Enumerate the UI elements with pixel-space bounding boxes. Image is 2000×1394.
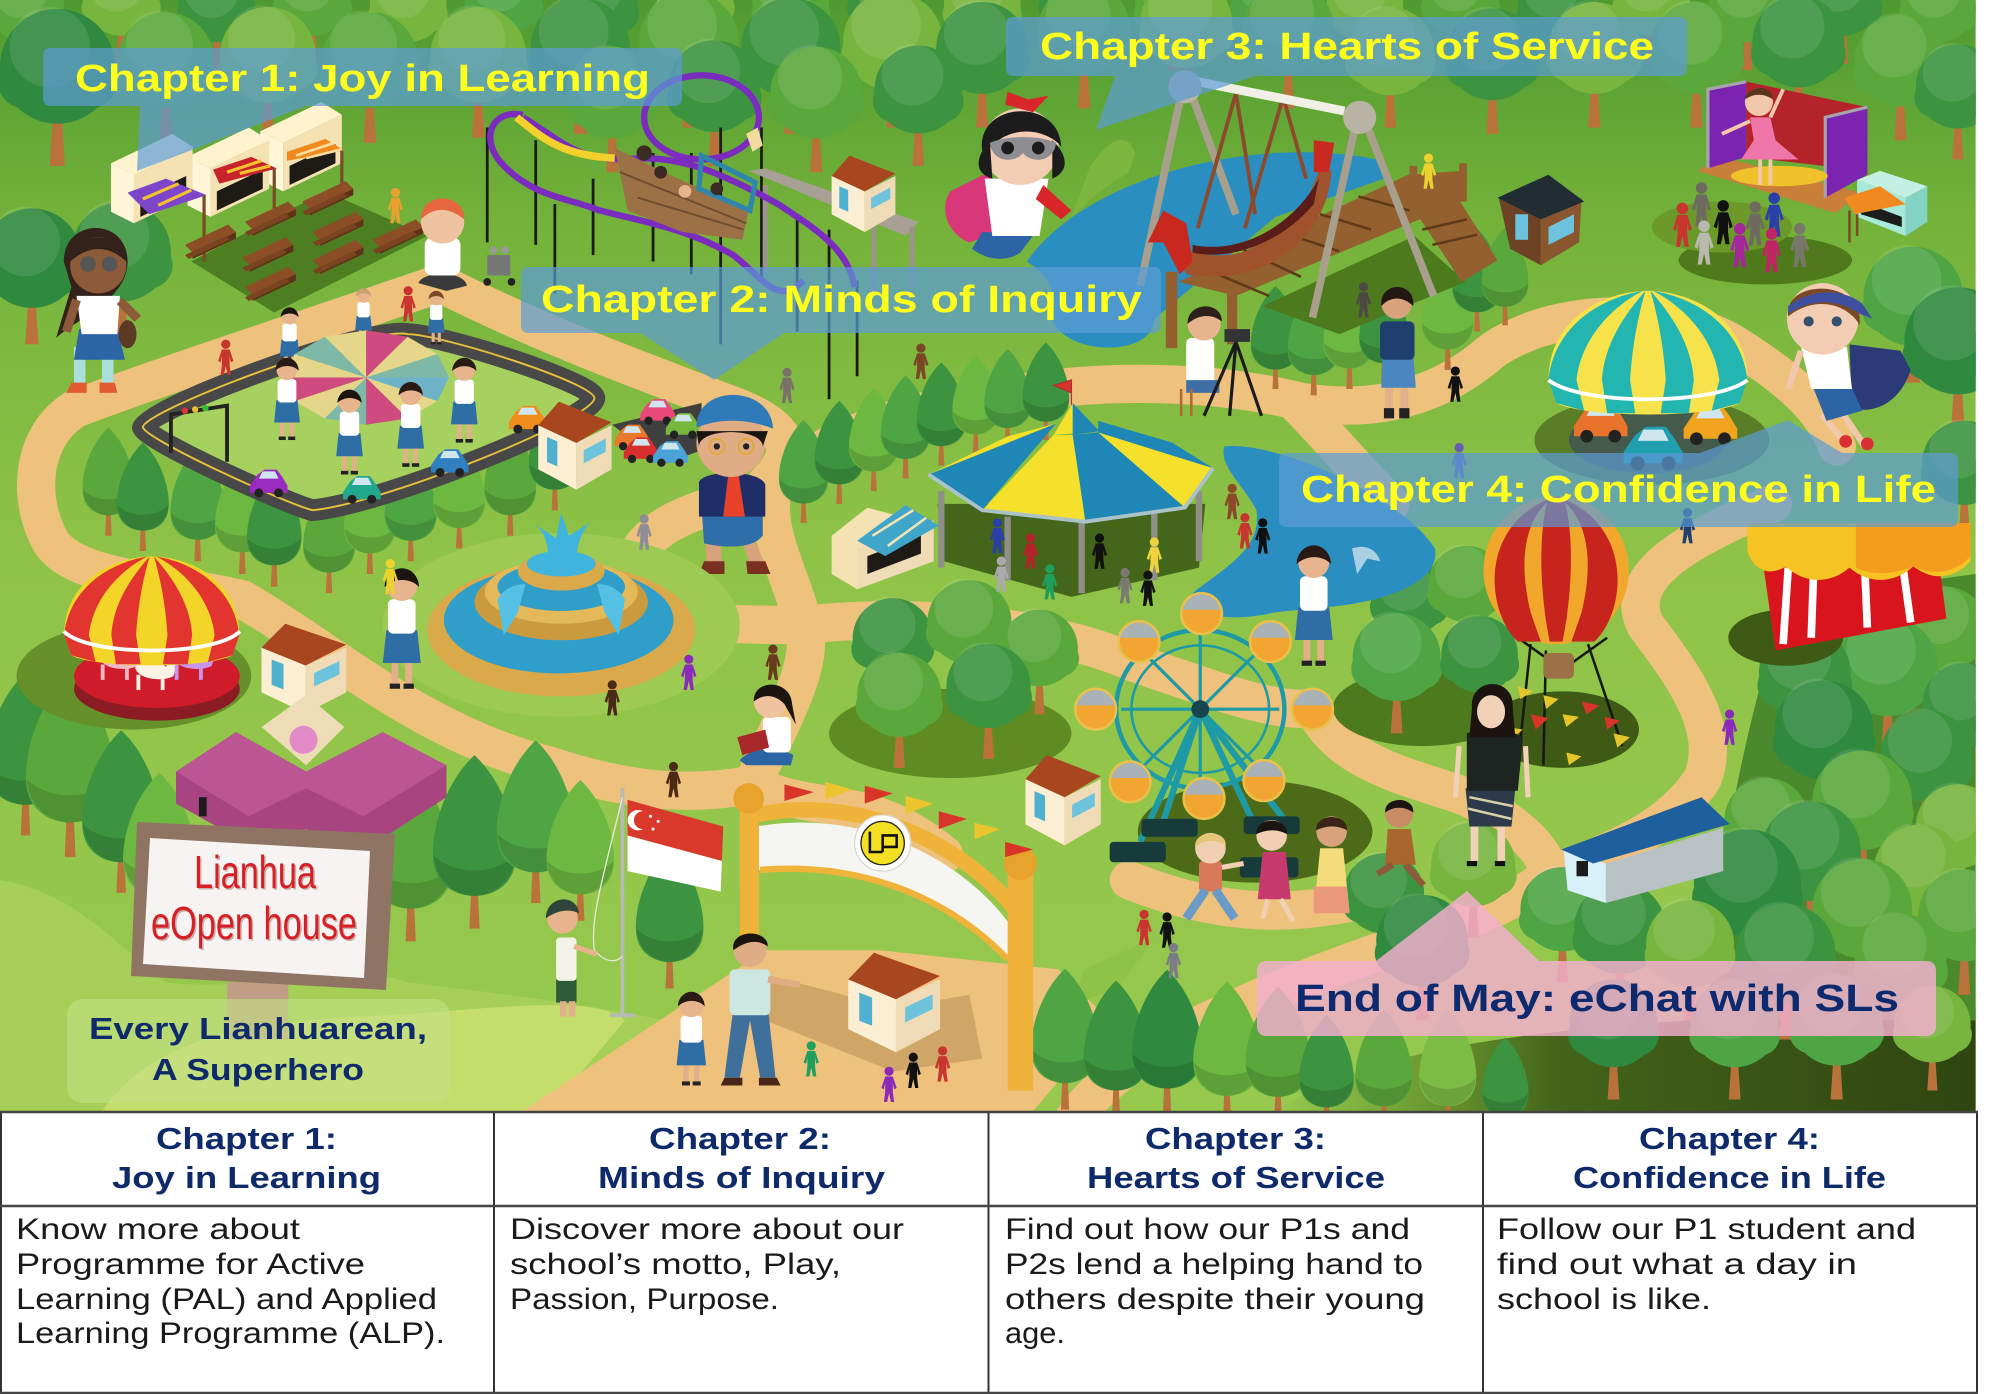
character: girl with satchel bbox=[56, 228, 138, 393]
house: beside track bbox=[538, 402, 612, 490]
signboard: Lianhua eOpen house: eOpen house bbox=[151, 897, 357, 949]
big tent bbox=[929, 380, 1213, 606]
column: Chapter 2: Passion, Purpose. bbox=[510, 1283, 779, 1316]
blue-roof shed bbox=[1561, 797, 1730, 903]
column: Chapter 2 bbox=[510, 1121, 904, 1316]
house: by the gate bbox=[848, 953, 940, 1052]
stall: blue awning bbox=[832, 505, 939, 589]
stalls and picnic benches bbox=[111, 102, 427, 312]
characters: four running children bbox=[1186, 800, 1423, 921]
column: Chapter 4: school is like. bbox=[1497, 1283, 1711, 1316]
fountain bbox=[383, 513, 740, 717]
school gate arch bbox=[733, 782, 1037, 1111]
house: beside horse carousel bbox=[261, 624, 346, 713]
column: Chapter 4: find out what a day in bbox=[1497, 1248, 1857, 1281]
callout: Chapter 2: Chapter 2: Minds of Inquiry bbox=[541, 279, 1142, 321]
column: Chapter 1: Programme for Active bbox=[16, 1248, 365, 1281]
mint stall bbox=[1844, 171, 1927, 242]
callout: Chapter 2 bbox=[521, 267, 1161, 380]
column: Chapter 3: others despite their young bbox=[1005, 1283, 1425, 1316]
ferris wheel bbox=[1075, 593, 1372, 883]
paths bbox=[36, 283, 1837, 1122]
character: boy raising flag bbox=[546, 899, 597, 1017]
character: student near fountain bbox=[383, 568, 421, 689]
stage with dancer bbox=[1698, 82, 1867, 213]
column: Chapter 2: school’s motto, Play, bbox=[510, 1248, 841, 1281]
callout: Chapter 4: Chapter 4: Confidence in Life bbox=[1301, 469, 1936, 511]
hut: dark roof bbox=[1497, 175, 1584, 265]
column: Chapter 3: age. bbox=[1005, 1317, 1065, 1350]
hot air balloon bbox=[1483, 496, 1639, 768]
purple building bbox=[176, 696, 446, 834]
column: Chapter 1: Chapter 1: bbox=[156, 1121, 337, 1156]
character: student in blazer bbox=[1380, 287, 1416, 418]
character: teacher in black top bbox=[1455, 684, 1528, 866]
chapter table bbox=[0, 1112, 1978, 1394]
column: Chapter 1: Learning (PAL) and Applied bbox=[16, 1283, 437, 1316]
car carousel bbox=[1534, 291, 1769, 485]
character: boy with headband and cape bbox=[1787, 283, 1911, 450]
swing boat ride bbox=[1140, 70, 1497, 348]
track with parachute game bbox=[143, 288, 594, 510]
callout: End of May eChat bbox=[1257, 891, 1936, 1036]
column: Chapter 1: Know more about bbox=[16, 1213, 301, 1246]
character: red-haired boy with robot bbox=[418, 198, 515, 291]
house: beside ferris wheel bbox=[1026, 755, 1101, 845]
column: Chapter 4: Chapter 4: bbox=[1639, 1121, 1820, 1156]
character: girl reading bbox=[737, 685, 796, 765]
column: Chapter 3: Find out how our P1s and bbox=[1005, 1213, 1410, 1246]
small visitor silhouettes bbox=[218, 153, 1737, 1102]
pond with dolphin bbox=[1190, 446, 1435, 617]
column: Chapter 4 bbox=[1497, 1121, 1916, 1316]
audience crowd bbox=[1652, 182, 1852, 284]
character: student writing by pond bbox=[1295, 545, 1333, 666]
column: Chapter 4: Follow our P1 student and bbox=[1497, 1213, 1916, 1246]
column: Chapter 2: Chapter 2: bbox=[649, 1121, 831, 1156]
column: Chapter 4: Confidence in Life bbox=[1573, 1160, 1886, 1195]
callout: Chapter 1 bbox=[43, 48, 682, 171]
pond: behind swing ride bbox=[1027, 152, 1384, 348]
character: boy with camera and tripod bbox=[1181, 306, 1261, 416]
forest: cone tree rows bbox=[0, 228, 1528, 989]
signboard: Lianhua eOpen house: Lianhua bbox=[194, 846, 316, 898]
signboard: Lianhua eOpen house bbox=[131, 822, 395, 990]
callout: Chapter 4 bbox=[1279, 420, 1958, 527]
column: Chapter 3: P2s lend a helping hand to bbox=[1005, 1248, 1423, 1281]
tagline: Every Lianhuarean, A Superhero: Every Lianhuarean, bbox=[89, 1011, 427, 1046]
callout: Chapter 3 bbox=[1006, 17, 1687, 130]
column: Chapter 1 bbox=[16, 1121, 445, 1350]
sign post bbox=[227, 982, 288, 1040]
roller coaster bbox=[487, 75, 918, 399]
callout: Chapter 3: Chapter 3: Hearts of Service bbox=[1040, 26, 1654, 68]
forest: side and clump trees bbox=[0, 200, 2000, 778]
column: Chapter 1: Learning Programme (ALP). bbox=[16, 1317, 445, 1350]
character: boy with blue cap bbox=[696, 395, 773, 574]
Singapore flag and pole bbox=[593, 788, 723, 1015]
tagline: Every Lianhuarean, A Superhero: A Superhero bbox=[152, 1052, 364, 1087]
character: flying girl with red bow bbox=[945, 92, 1071, 259]
column: Chapter 3: Chapter 3: bbox=[1145, 1121, 1326, 1156]
column: Chapter 3: Hearts of Service bbox=[1087, 1160, 1385, 1195]
tagline: Every Lianhuarean, A Superhero bbox=[67, 999, 450, 1103]
callout: Chapter 1: Chapter 1: Joy in Learning bbox=[75, 58, 650, 100]
forest: top band bbox=[0, 0, 2000, 172]
circus tent bbox=[1728, 523, 1971, 666]
column: Chapter 1: Joy in Learning bbox=[112, 1160, 381, 1195]
column: Chapter 3 bbox=[1005, 1121, 1425, 1350]
white right margin bbox=[1977, 0, 2000, 1394]
hill: near swing bbox=[1071, 140, 1135, 217]
column: Chapter 2: Minds of Inquiry bbox=[598, 1160, 886, 1195]
house: by the dock bbox=[832, 156, 895, 232]
car park bbox=[612, 399, 702, 467]
signboard: Lianhua eOpen house: Lianhua bbox=[196, 848, 318, 900]
character: father and daughter bbox=[677, 933, 800, 1085]
callout: End of May eChat: End of May: eChat with SLs bbox=[1295, 978, 1899, 1020]
forest: lower right bbox=[1031, 560, 2000, 1135]
signboard: Lianhua eOpen house: eOpen house bbox=[152, 898, 358, 950]
column: Chapter 2: Discover more about our bbox=[510, 1213, 904, 1246]
horse carousel bbox=[17, 556, 251, 730]
